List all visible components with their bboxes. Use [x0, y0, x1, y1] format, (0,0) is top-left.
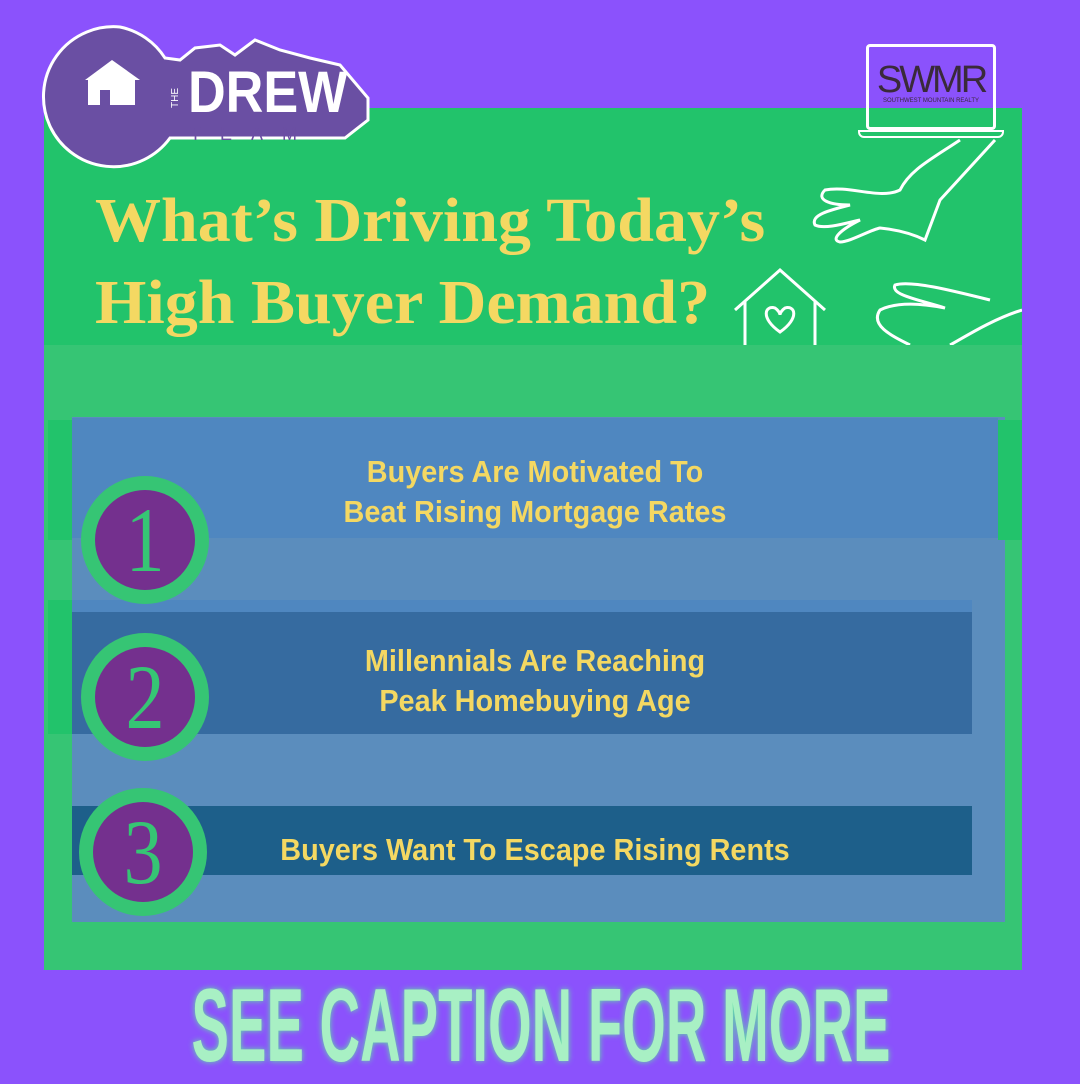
icon: hands and house outline	[734, 138, 1022, 345]
text: item 1: Beat Rising Mortgage Rates	[344, 494, 726, 529]
icon: number 1	[81, 476, 209, 604]
bar 3	[72, 806, 972, 875]
text: item 2: Peak Homebuying Age	[379, 683, 691, 718]
panel: list	[72, 417, 1005, 922]
logo: The Drew Team key: THE	[170, 88, 181, 108]
text: item 1	[344, 454, 726, 529]
text: item 2	[365, 643, 705, 718]
icon: number 3: 3	[123, 801, 163, 903]
logo: SWMR laptop: SOUTHWEST MOUNTAIN REALTY	[883, 98, 979, 104]
title	[95, 187, 765, 337]
text: item 3: Buyers Want To Escape Rising Rents	[280, 832, 790, 867]
icon: number 3	[79, 788, 207, 916]
footer text: SEE CAPTION FOR MORE	[192, 968, 890, 1084]
logo: The Drew Team key: TEAM	[190, 124, 316, 144]
text: item 2: Millennials Are Reaching	[365, 643, 705, 678]
icon: number 2	[81, 633, 209, 761]
logo: The Drew Team key	[42, 25, 370, 168]
green panel	[44, 108, 1022, 970]
title: High Buyer Demand?	[95, 269, 710, 337]
bar 1	[72, 418, 998, 538]
logo: SWMR laptop	[858, 44, 1004, 138]
logo: SWMR laptop: SWMR	[877, 59, 985, 101]
logo: The Drew Team key: DREW	[188, 59, 347, 125]
bar 2	[72, 600, 972, 734]
title: What’s Driving Today’s	[95, 187, 765, 255]
icon: number 2: 2	[125, 646, 165, 748]
icon: number 1: 1	[125, 489, 165, 591]
text: item 1: Buyers Are Motivated To	[367, 454, 703, 489]
